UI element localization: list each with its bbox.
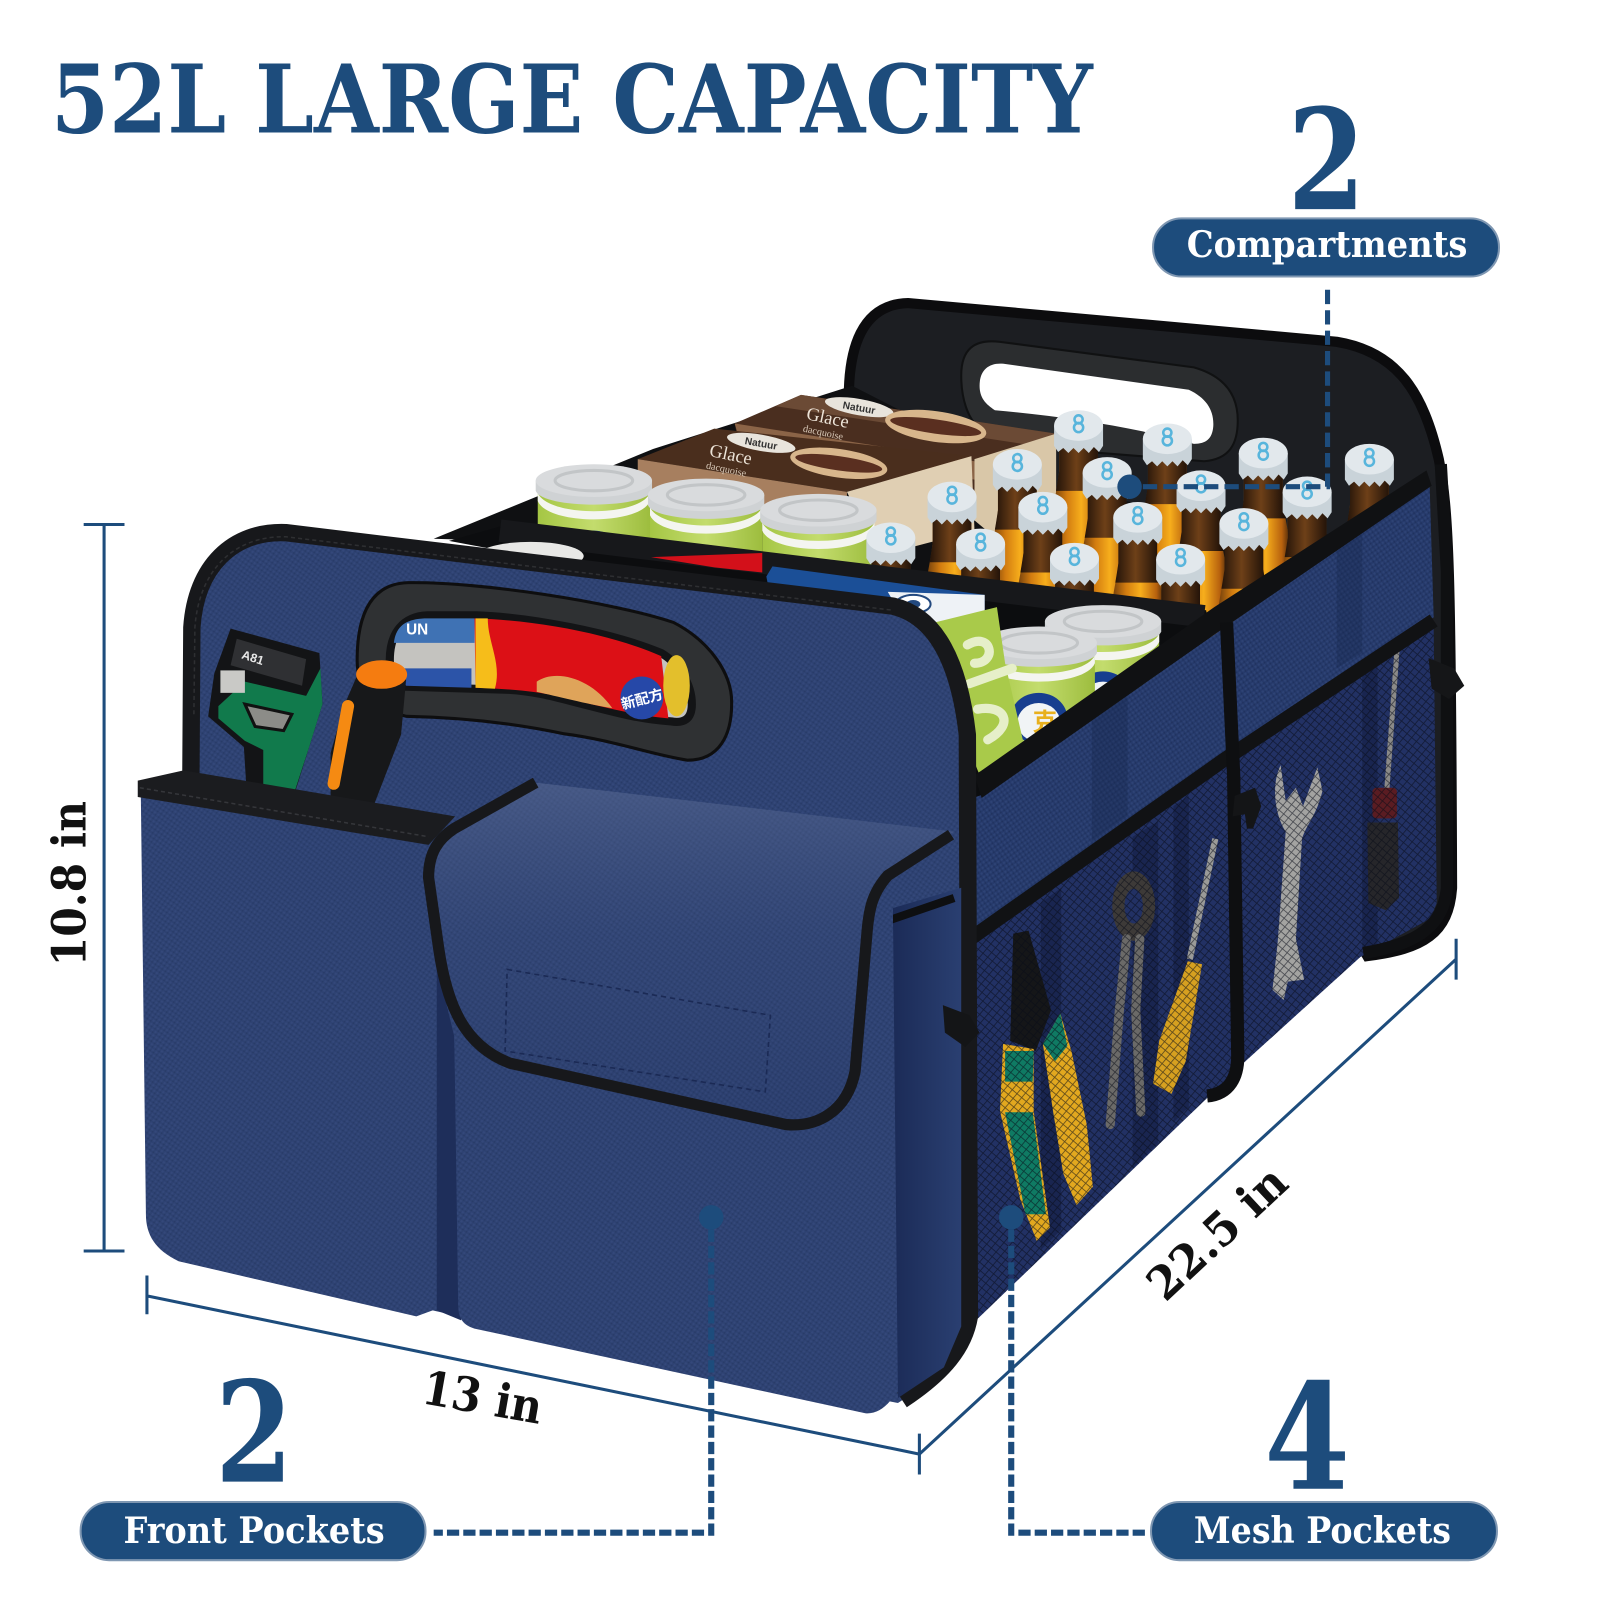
icon: green power tool battery: A81 — [240, 648, 266, 668]
snack boxes — [638, 393, 1056, 556]
right strip and gap between pockets — [437, 888, 980, 1398]
callout: 2 front pockets: Front Pockets — [123, 1509, 385, 1552]
right front pocket flap — [429, 783, 954, 1125]
right front pocket body — [454, 898, 896, 1413]
snack boxes: Natuur — [842, 400, 876, 417]
dimension: width 13 in — [147, 1276, 919, 1474]
snack boxes: dacquoise — [802, 424, 844, 443]
left front pocket — [138, 770, 455, 1316]
side mesh pockets with tools — [964, 620, 1437, 1332]
green snack bag — [918, 607, 1024, 772]
icon: wrench — [1272, 765, 1322, 1000]
interior floor of back compartment — [434, 386, 1429, 622]
front handle with snack window: UN — [406, 622, 428, 639]
front handle with snack window: 新配方 — [619, 685, 665, 713]
snack boxes: Natuur — [744, 436, 778, 453]
callout: 2 compartments: Compartments — [1187, 223, 1467, 266]
icon: yellow screwdriver — [1153, 839, 1215, 1094]
back panel with handle — [849, 303, 1452, 956]
title: 52L LARGE CAPACITY — [51, 45, 1094, 156]
dimension: length 22.5 in — [919, 939, 1456, 1454]
side strap and buckle — [1207, 622, 1261, 1096]
callout: 2 front pockets — [81, 1205, 723, 1560]
callout: 4 mesh pockets — [999, 1205, 1497, 1560]
callout: 2 compartments: 2 — [1288, 78, 1365, 242]
snack boxes: dacquoise — [705, 460, 748, 480]
front compartment and divider — [449, 527, 1214, 816]
front handle with snack window — [357, 583, 732, 760]
callout: 2 compartments — [1117, 78, 1499, 499]
callout: 2 front pockets: 2 — [215, 1351, 293, 1515]
chip cans back row — [536, 464, 877, 665]
side upper band — [964, 484, 1434, 944]
organizer bag illustration — [138, 303, 1464, 1413]
callout: 4 mesh pockets: 4 — [1264, 1351, 1350, 1524]
dimension: height 10.8 in: 10.8 in — [43, 801, 98, 966]
front chip cans — [981, 605, 1161, 798]
blue card box — [766, 566, 985, 663]
front upper panel — [187, 528, 971, 1403]
front chip cans: 克 — [1033, 709, 1057, 737]
icon: orange handled screwdriver — [331, 660, 407, 806]
snack boxes: Glace — [708, 440, 754, 469]
icon: pliers — [1000, 931, 1093, 1241]
callout: 4 mesh pockets: Mesh Pockets — [1194, 1509, 1451, 1552]
dimension: length 22.5 in: 22.5 in — [1136, 1155, 1298, 1311]
icon: green power tool battery — [208, 629, 322, 796]
beer bottles — [864, 410, 1396, 824]
right edge binding and ear — [1363, 464, 1464, 953]
dimension: height 10.8 in — [43, 524, 124, 1251]
dimension: width 13 in: 13 in — [418, 1361, 546, 1436]
side rim binding — [974, 470, 1432, 798]
icon: nippers — [1110, 871, 1155, 1124]
icon: dark screwdriver — [1367, 651, 1399, 910]
snack boxes: Glace — [805, 403, 851, 432]
